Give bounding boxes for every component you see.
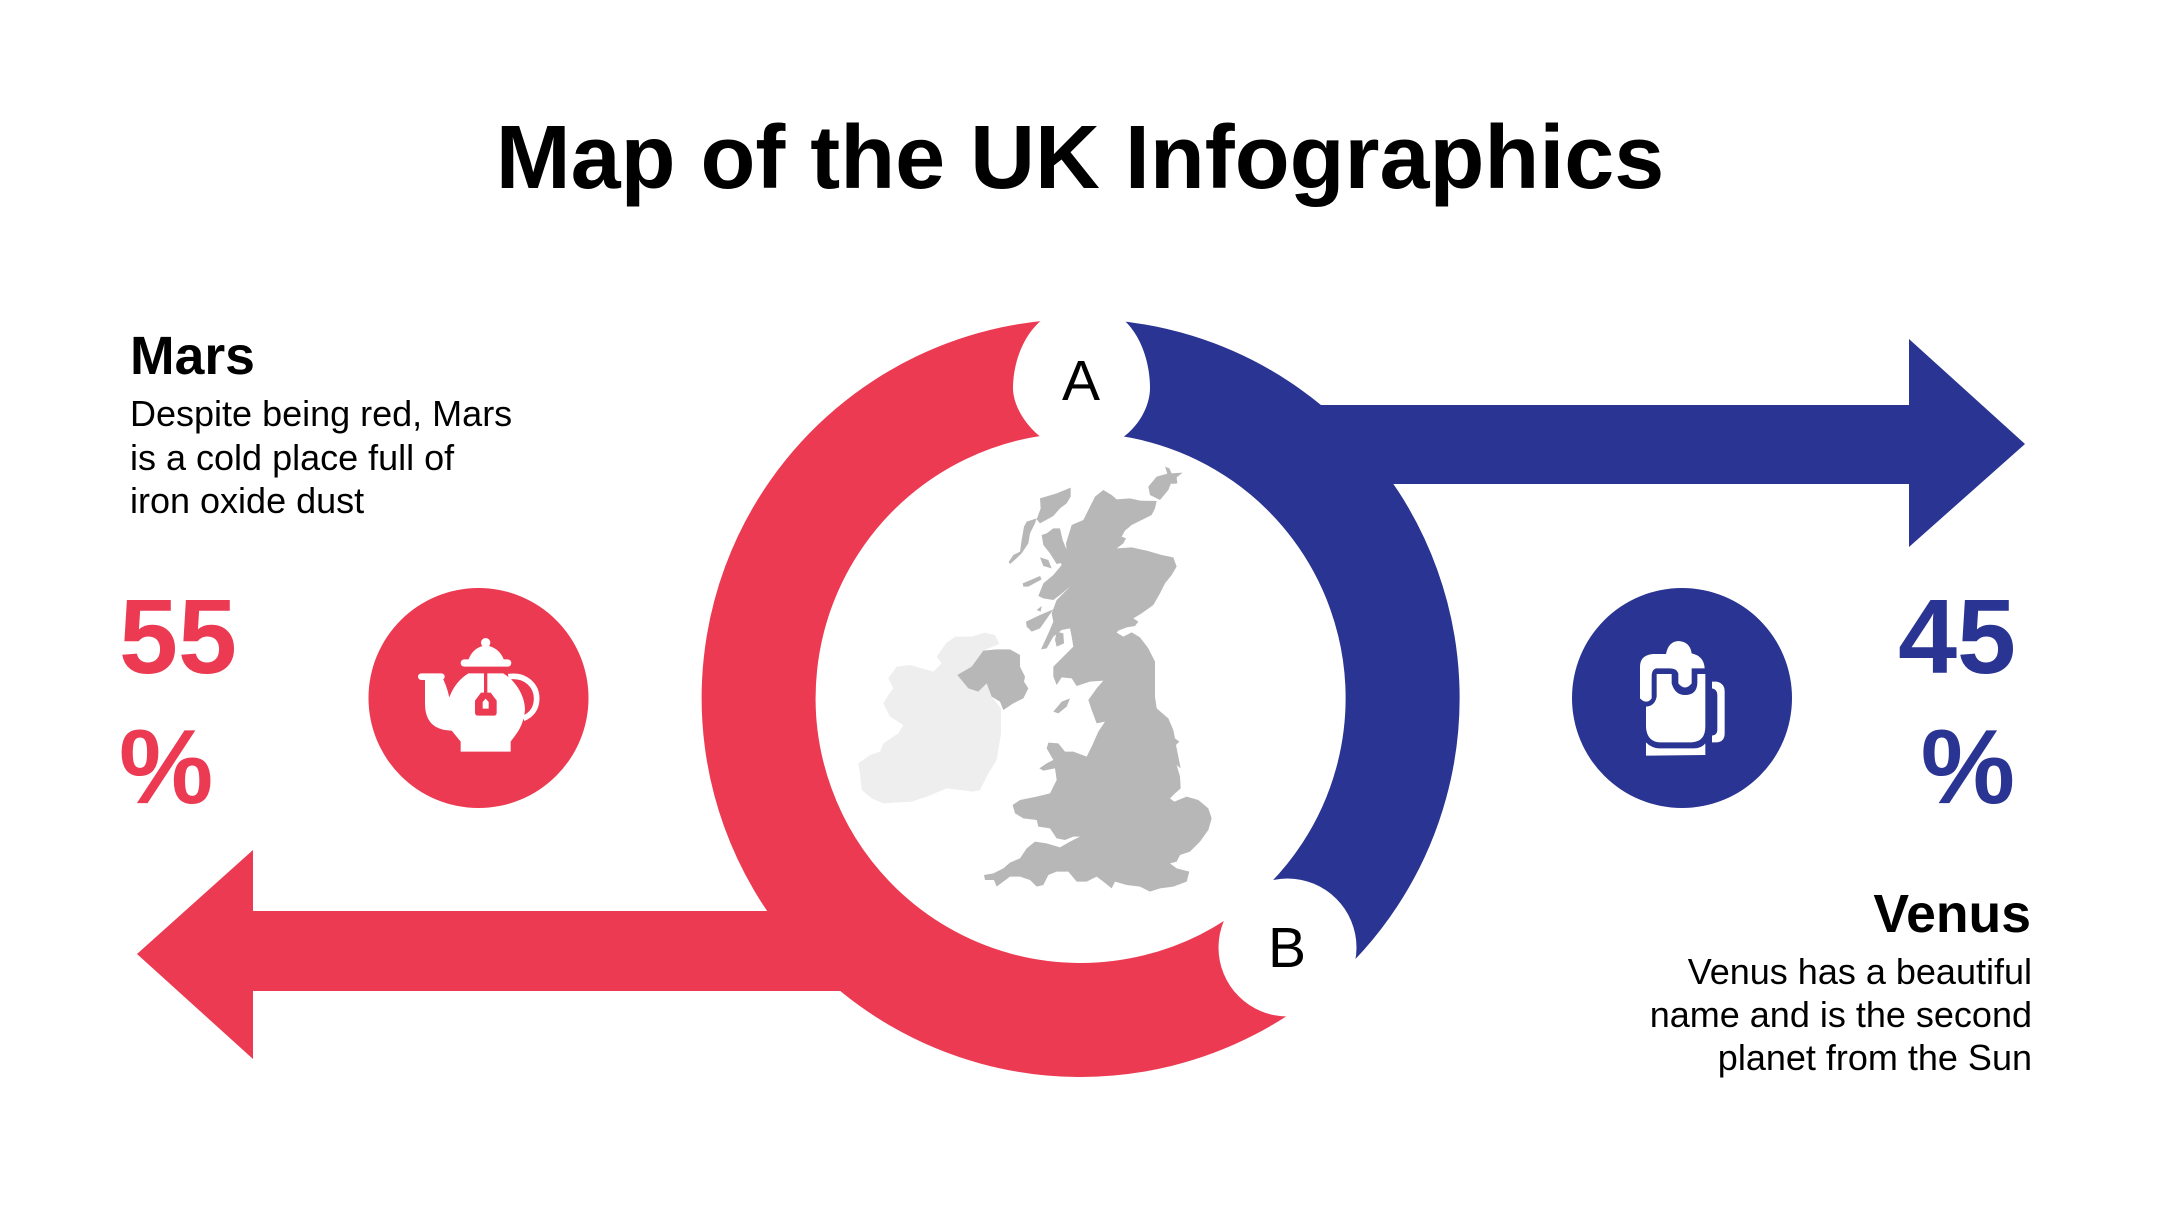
body: Mars: [130, 393, 512, 521]
badge B: B: [1268, 916, 1306, 980]
panel: Mars text: [130, 327, 512, 521]
stat: 45%: [1898, 578, 2016, 826]
body: Venus: [1650, 951, 2032, 1078]
badge A: [1013, 316, 1150, 438]
Ireland: [858, 633, 1001, 803]
title: Map of the UK Infographics: [496, 108, 1664, 208]
heading: Venus: Venus: [1873, 885, 2031, 944]
heading: Mars: Mars: [130, 327, 255, 386]
stat: 55%: [119, 578, 237, 826]
arrow: red left: [137, 850, 855, 1059]
panel: Venus text: [1650, 885, 2032, 1078]
body: Venus: Venus has a beautiful: [1688, 951, 2032, 992]
stat: 45%: 45: [1898, 578, 2016, 696]
red ring arc: [759, 376, 1286, 1020]
icon: teapot: [368, 588, 588, 808]
body: Mars: is a cold place full of: [130, 437, 455, 478]
stat: 55%: %: [119, 708, 213, 826]
panel: red ring and arrow: [137, 376, 1286, 1059]
icon: beer mug: [1572, 588, 1792, 808]
body: Venus: name and is the second: [1650, 994, 2032, 1035]
stat: 45%: %: [1921, 708, 2015, 826]
blue ring arc: [1081, 376, 1403, 946]
panel: blue ring and arrow: [1081, 339, 2025, 946]
arrow: blue right: [1300, 339, 2025, 547]
Great Britain and Northern Ireland: [957, 467, 1212, 892]
badge A: A: [1062, 349, 1100, 413]
map of UK and Ireland: [858, 467, 1212, 892]
body: Mars: iron oxide dust: [130, 480, 364, 521]
stat: 55%: 55: [119, 578, 237, 696]
body: Venus: planet from the Sun: [1718, 1037, 2032, 1078]
badge B: [1218, 878, 1356, 1016]
body: Mars: Despite being red, Mars: [130, 393, 512, 434]
